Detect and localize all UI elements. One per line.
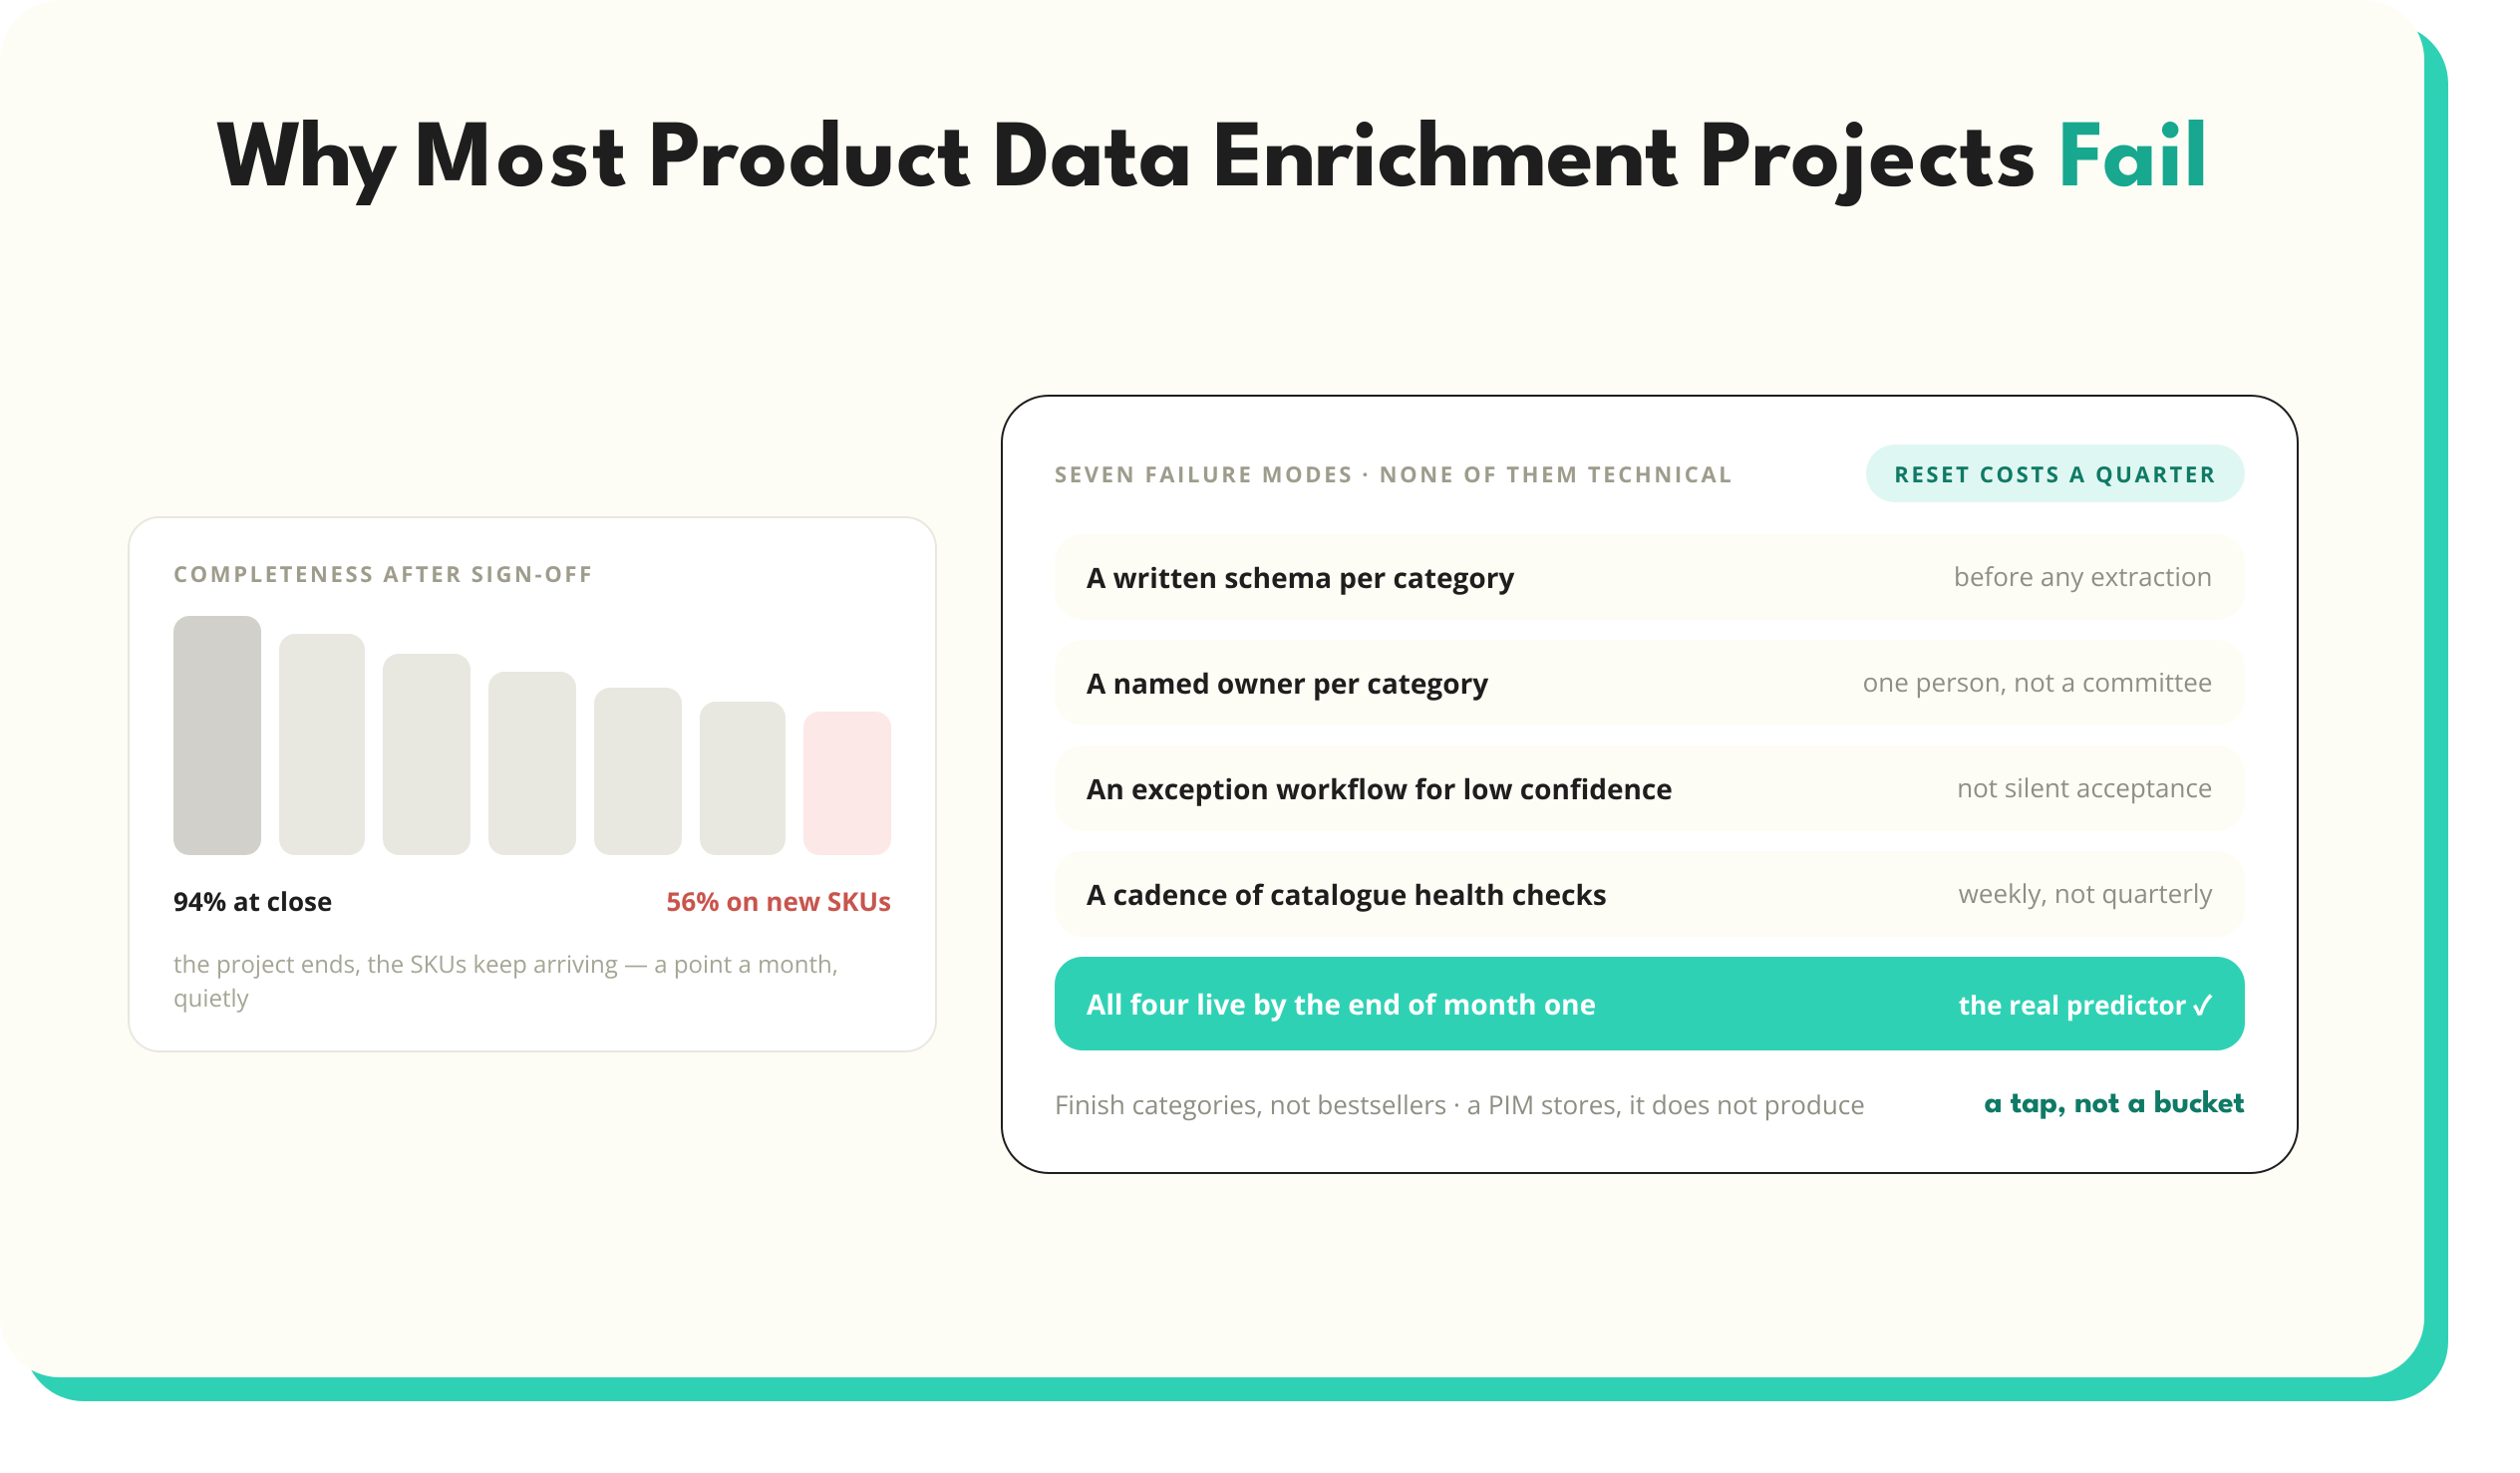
footnote: Finish categories, not bestsellers · a PIM stores, it does not produce xyxy=(1055,1086,1865,1122)
row: catalogue health checks: weekly, not quarterly xyxy=(1959,875,2213,911)
row: named owner: A named owner per category xyxy=(1087,666,1488,704)
row: highlighted predictor: All four live by the end of month one xyxy=(1087,987,1596,1025)
panel: completeness card xyxy=(128,516,937,1052)
callout: a tap, not a bucket: a tap, not a bucket xyxy=(1985,1090,2245,1120)
row: written schema: A written schema per category xyxy=(1087,560,1514,598)
title xyxy=(216,119,2210,208)
title: Most xyxy=(415,119,630,208)
row: named owner: one person, not a committee xyxy=(1863,664,2213,700)
heading: completeness after sign-off: COMPLETENESS AFTER SIGN-OFF xyxy=(173,560,594,590)
row: catalogue health checks xyxy=(1055,851,2245,937)
row: exception workflow xyxy=(1055,745,2245,831)
label: 94% at close: 94% at close xyxy=(173,883,332,919)
row: named owner xyxy=(1055,640,2245,726)
panel: failure modes card xyxy=(1001,395,2299,1174)
text: chart description: the project ends, the SKUs keep arriving — a point a month, quietly xyxy=(173,946,838,1015)
title: Data xyxy=(993,119,1193,208)
badge: reset costs a quarter: RESET COSTS A QUARTER xyxy=(1894,460,2217,490)
label: 56% on new SKUs: 56% on new SKUs xyxy=(667,883,891,919)
row: highlighted predictor xyxy=(1055,957,2245,1050)
row: written schema xyxy=(1055,534,2245,620)
row: written schema: before any extraction xyxy=(1954,558,2213,594)
row: highlighted predictor: the real predictor ✓ xyxy=(1959,987,2212,1023)
title: Projects xyxy=(1701,119,2039,208)
bar chart: completeness decay xyxy=(173,616,891,855)
row: exception workflow: not silent acceptance xyxy=(1957,769,2213,805)
badge: reset costs a quarter xyxy=(1866,444,2245,502)
row: exception workflow: An exception workflow for low confidence xyxy=(1087,771,1673,809)
title: Why xyxy=(216,119,394,208)
title: Product xyxy=(649,119,973,208)
title: Enrichment xyxy=(1213,119,1679,208)
row: catalogue health checks: A cadence of catalogue health checks xyxy=(1087,877,1607,915)
heading: seven failure modes: SEVEN FAILURE MODES · NONE OF THEM TECHNICAL xyxy=(1055,460,1733,490)
title: Fail xyxy=(2058,119,2210,208)
